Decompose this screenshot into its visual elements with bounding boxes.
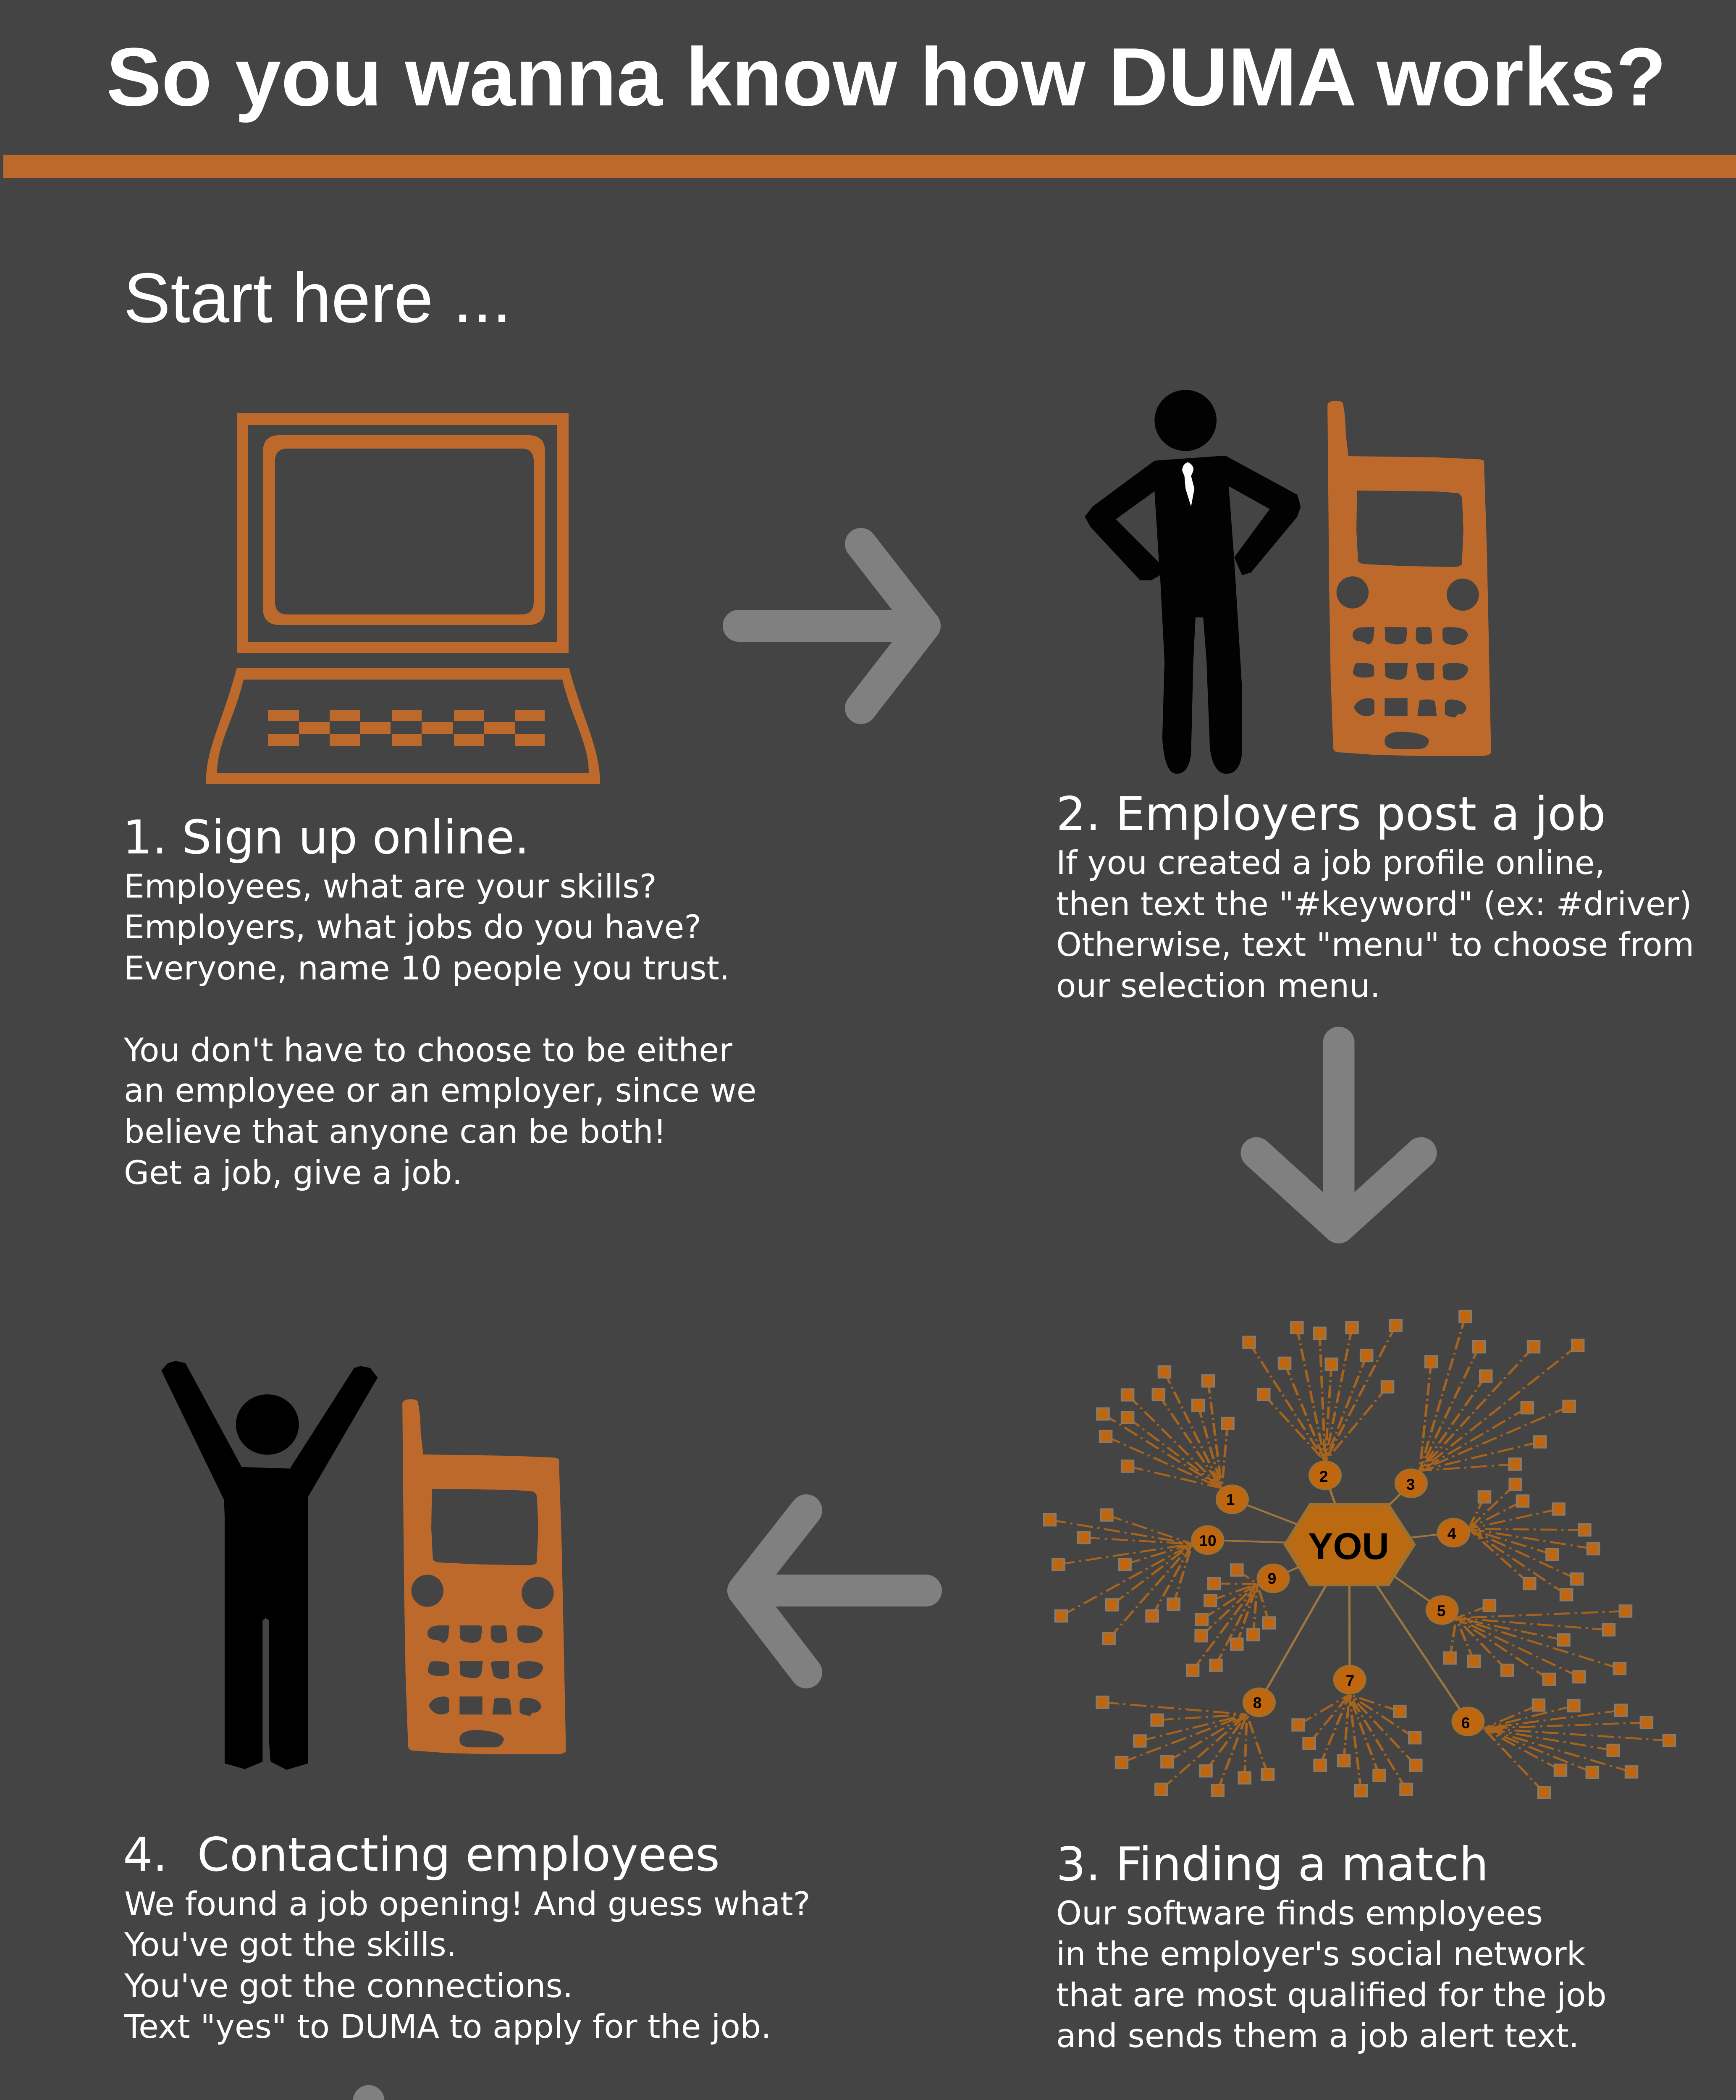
step 4 text: 4. Contacting employees [123, 1828, 720, 1882]
icon: mobile phone 2 [402, 1399, 566, 1754]
step 1 text: Employers, what jobs do you have? [124, 908, 701, 946]
step 3 text: and sends them a job alert text. [1056, 2017, 1579, 2055]
arrow: step 2 down to step 3 [1256, 1042, 1421, 1228]
step 1 text: You don't have to choose to be either [123, 1032, 732, 1069]
dashed links to contacts [1050, 1317, 1669, 1793]
step 4 text [123, 1828, 810, 2046]
step 1 text: 1. Sign up online. [123, 811, 530, 865]
icon: person with raised arms [161, 1361, 378, 1770]
step 1 text: Employees, what are your skills? [124, 868, 657, 906]
step 2 text: our selection menu. [1056, 967, 1380, 1005]
YOU hexagon [1285, 1504, 1414, 1585]
icon: businessman with tie [1085, 390, 1301, 774]
arrow: step 3 back to step 4 [743, 1510, 926, 1672]
step 4 text: Text "yes" to DUMA to apply for the job. [124, 2008, 771, 2046]
step 3 text: that are most qualified for the job [1056, 1977, 1607, 2014]
step 1 text: Get a job, give a job. [124, 1154, 462, 1192]
step 1 text: Everyone, name 10 people you trust. [124, 950, 730, 987]
icon: mobile phone 1 [1327, 401, 1491, 756]
step 2 text: then text the "#keyword" (ex: #driver) [1056, 885, 1692, 923]
arrow: laptop to employer [739, 544, 925, 708]
step 1 text [123, 811, 757, 1192]
step 2 text: 2. Employers post a job [1056, 787, 1606, 841]
node numbers: 4 [1448, 1525, 1456, 1542]
node numbers: 7 [1346, 1672, 1354, 1689]
node numbers: 1 [1226, 1491, 1235, 1508]
node numbers: 3 [1406, 1476, 1415, 1493]
node circles [1192, 1461, 1484, 1735]
hub spokes [1208, 1475, 1468, 1722]
node numbers: 8 [1253, 1694, 1261, 1712]
start label: Start here ... [123, 258, 511, 337]
step 1 text: believe that anyone can be both! [124, 1113, 666, 1151]
node numbers: 6 [1461, 1714, 1470, 1732]
step 1 text: an employee or an employer, since we [124, 1072, 757, 1110]
step 3 text [1056, 1838, 1607, 2055]
node numbers: 5 [1437, 1602, 1445, 1620]
title: So you wanna know how DUMA works? [106, 31, 1666, 123]
icon: laptop [206, 413, 600, 784]
chart: social network diagram [1044, 1310, 1675, 1798]
YOU label: YOU [1308, 1525, 1389, 1567]
node numbers [1199, 1468, 1470, 1732]
step 4 text: We found a job opening! And guess what? [124, 1885, 810, 1923]
orange title bar [3, 155, 1736, 178]
step 2 text: Otherwise, text "menu" to choose from [1056, 926, 1694, 964]
node numbers: 2 [1319, 1468, 1328, 1485]
step 4 text: You've got the skills. [124, 1926, 456, 1964]
step 2 text [1056, 787, 1694, 1005]
step 4 text: You've got the connections. [124, 1967, 573, 2005]
node numbers: 9 [1268, 1570, 1276, 1587]
node numbers: 10 [1199, 1532, 1217, 1549]
step 3 text: 3. Finding a match [1056, 1838, 1489, 1892]
step 3 text: Our software finds employees [1056, 1895, 1543, 1932]
step 3 text: in the employer's social network [1056, 1935, 1586, 1973]
contact squares [1044, 1310, 1675, 1798]
step 2 text: If you created a job profile online, [1056, 844, 1605, 882]
